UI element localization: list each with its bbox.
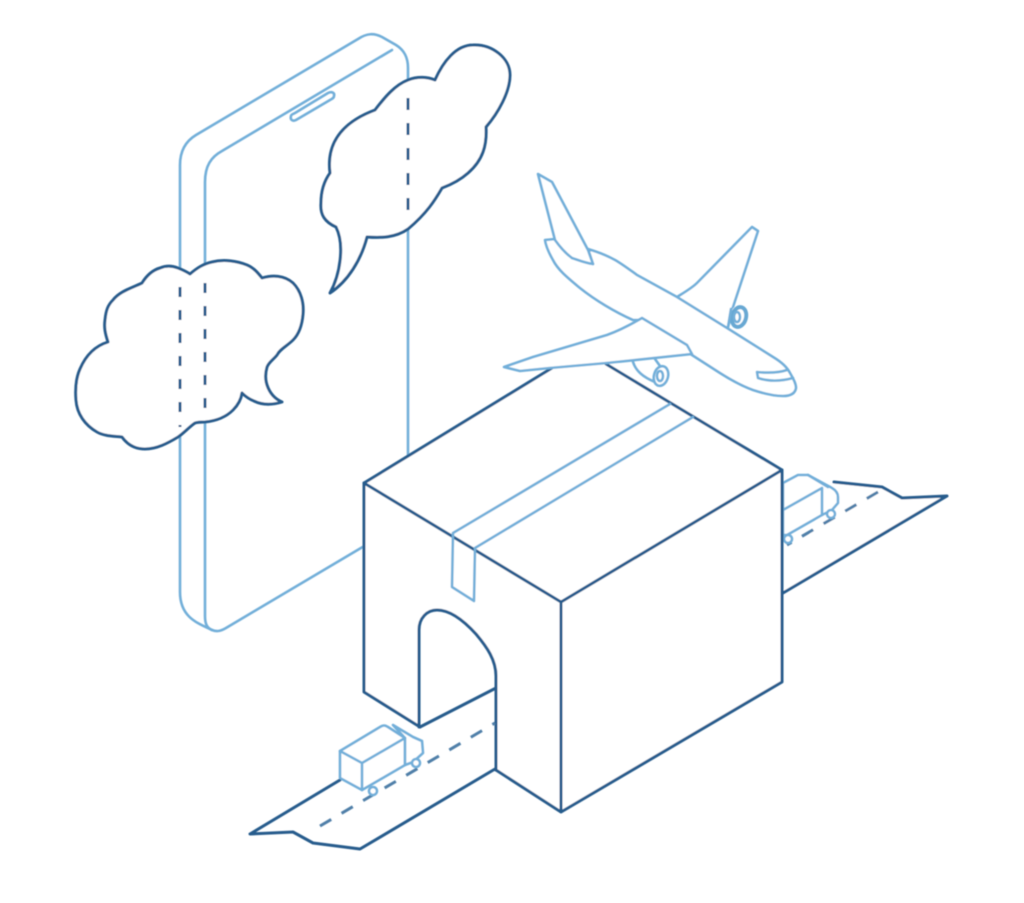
packing tape	[452, 404, 693, 601]
tail fin	[538, 174, 593, 264]
icon: phone speaker	[291, 92, 334, 121]
road centre dashes	[787, 492, 878, 545]
road centre dashes	[320, 723, 495, 826]
cardboard box	[364, 345, 782, 812]
airplane	[504, 174, 796, 396]
cockpit window	[757, 370, 793, 381]
far wing	[677, 227, 758, 327]
road: near section	[250, 723, 495, 849]
near engine	[633, 359, 670, 387]
box front edges	[364, 470, 782, 812]
dashed hidden phone edge	[406, 98, 410, 214]
icon: far truck	[783, 475, 838, 543]
road: far section	[783, 475, 947, 593]
speech bubble: upper cloud	[321, 45, 510, 293]
box arch opening	[419, 610, 496, 770]
speech bubble: left cloud	[76, 261, 303, 449]
near wing	[504, 318, 692, 371]
smartphone outline	[180, 34, 408, 631]
icon: near truck	[340, 725, 423, 795]
box top edges	[364, 364, 782, 483]
dashed hidden phone edges	[178, 287, 182, 427]
box body	[364, 345, 782, 812]
far engine	[728, 306, 748, 328]
fuselage	[545, 239, 796, 396]
